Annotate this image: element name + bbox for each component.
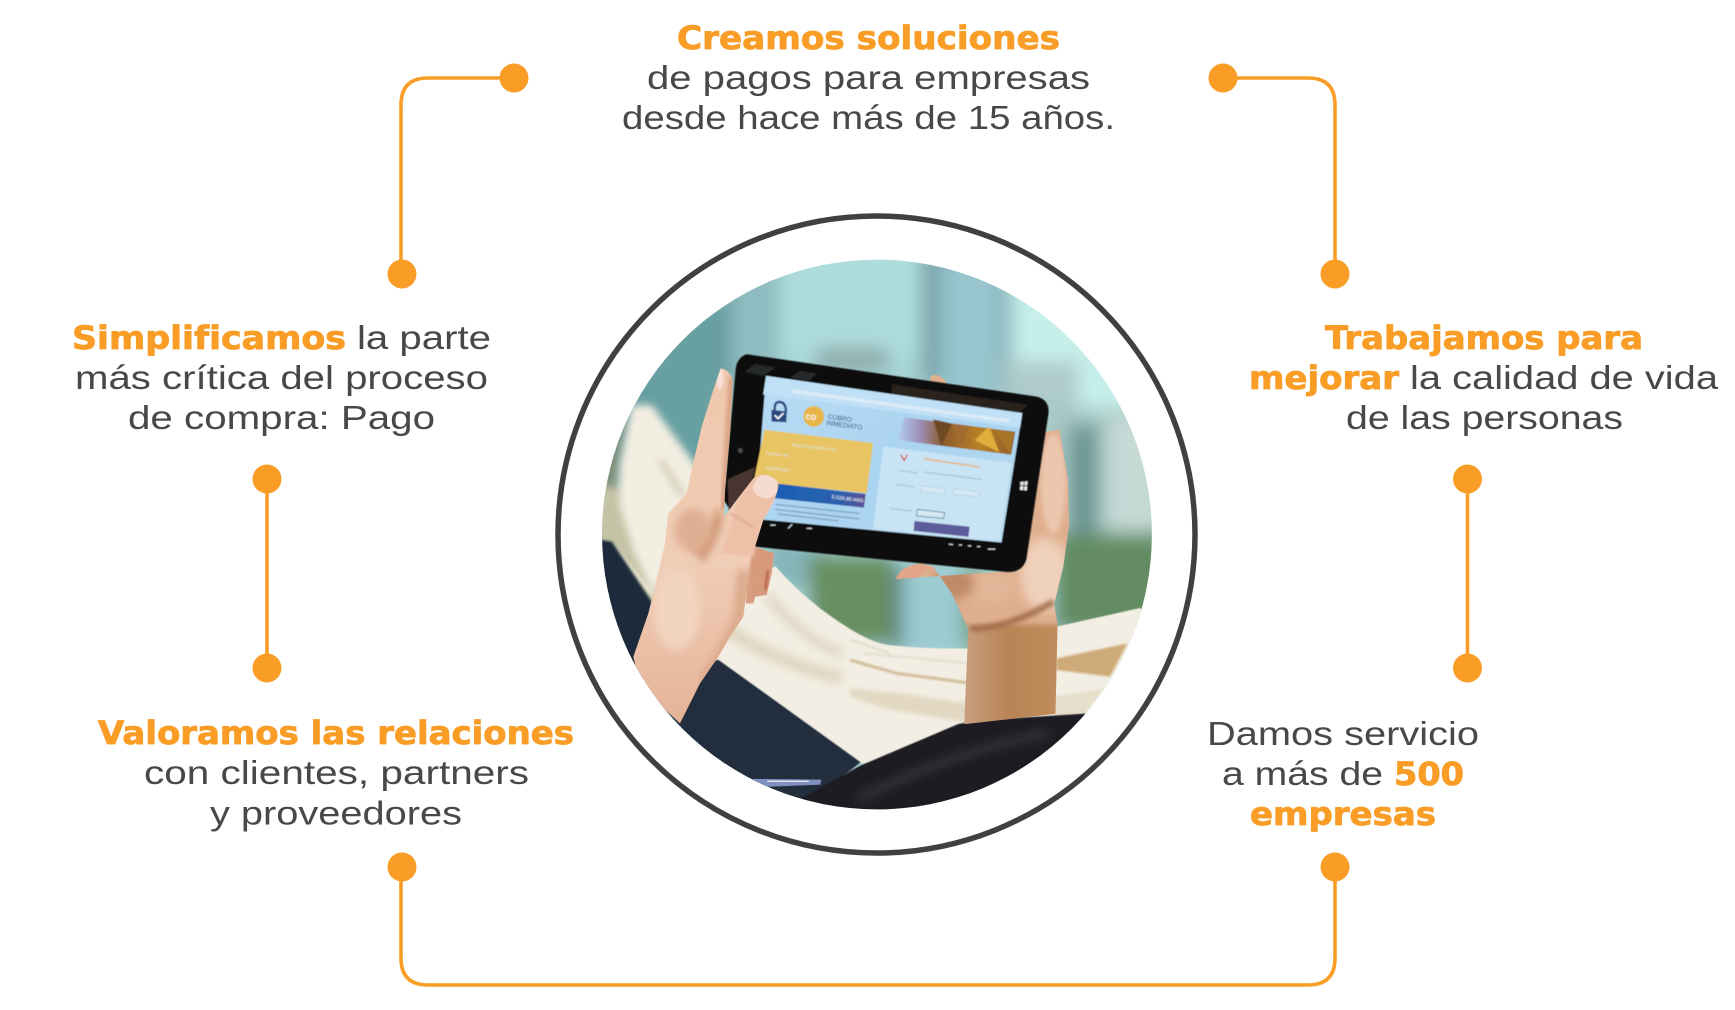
text: Trabajamos para mejorar [1249, 319, 1718, 437]
yellow summary panel: Número de [766, 451, 789, 458]
screen [754, 376, 1022, 549]
text: Simplificamos: la parte [357, 320, 491, 357]
lock icon [771, 402, 787, 422]
connector: top left [388, 64, 528, 288]
text: Trabajamos para mejorar: mejorar [1249, 359, 1399, 397]
bezel reflection [892, 384, 1028, 413]
camera [738, 448, 743, 453]
photo: hands holding tablet [602, 260, 1152, 810]
banner mosaic [898, 417, 1015, 455]
connector: bottom [388, 852, 1350, 985]
text lines under bar [775, 504, 859, 521]
text: Creamos soluciones: de pagos para empresas [647, 60, 1090, 97]
tablet [724, 354, 1049, 572]
yellow summary panel: Identificador [765, 465, 791, 473]
hammock fabric [583, 393, 1165, 763]
left hand [633, 368, 778, 724]
ring around photo [558, 216, 1195, 853]
text: Trabajamos para mejorar: la calidad de vida [1410, 360, 1718, 397]
logo [803, 406, 863, 432]
hammock left blurred part [602, 399, 695, 602]
windows logo [1020, 481, 1028, 491]
text: Simplificamos: Simplificamos [72, 319, 346, 357]
text: Damos servicio [1207, 716, 1479, 833]
connector: right [1453, 464, 1482, 682]
payment form panel [873, 446, 1012, 542]
text: Valoramos las relaciones: Valoramos las relaciones [98, 714, 574, 752]
yellow summary panel [754, 430, 873, 493]
text: Trabajamos para mejorar: Trabajamos para [1325, 319, 1643, 357]
connector: left [252, 464, 282, 682]
text: Valoramos las relaciones: y proveedores [210, 796, 462, 832]
palm shadow [690, 507, 723, 563]
blue total bar [774, 484, 866, 508]
tablet body [724, 354, 1049, 572]
text: Simplificamos: más crítica del proceso [75, 360, 488, 397]
text: Creamos soluciones: desde hace más de 15 años. [622, 100, 1115, 137]
dark trousers [585, 538, 861, 832]
index finger shading [723, 377, 732, 510]
hammock shading folds [850, 640, 1127, 722]
right hand and forearm [896, 375, 1069, 724]
text: Damos servicio: empresas [1250, 795, 1436, 833]
text: Trabajamos para mejorar: de las personas [1346, 400, 1623, 437]
lower fingers [744, 546, 774, 605]
logo: INMEDIATO [826, 420, 863, 432]
hammock main sheet [716, 566, 1142, 764]
text: Simplificamos: de compra: Pago [128, 400, 435, 437]
text: Simplificamos [72, 319, 491, 437]
taskbar icons [770, 524, 995, 549]
text: Damos servicio: Damos servicio [1207, 716, 1479, 753]
text: Damos servicio: a más de [1222, 756, 1383, 793]
text: Creamos soluciones: Creamos soluciones [677, 19, 1060, 57]
logo: CO [805, 414, 817, 422]
thumbnail [752, 473, 777, 499]
logo: COBRO [827, 414, 852, 424]
black sweater [800, 712, 1086, 810]
text: Damos servicio: 500 [1394, 755, 1464, 793]
hand reflection [727, 467, 755, 517]
text: Valoramos las relaciones: con clientes, partners [144, 755, 529, 792]
blurred window background [602, 260, 1152, 810]
thumb [722, 475, 778, 557]
text: Creamos soluciones [622, 19, 1115, 137]
text: Valoramos las relaciones [98, 714, 574, 832]
connector: top right [1208, 64, 1350, 288]
yellow summary panel: http://www.pagos.com [792, 442, 837, 452]
pay button [914, 521, 970, 537]
blue total bar: 5.024,80 ARS [831, 495, 864, 504]
